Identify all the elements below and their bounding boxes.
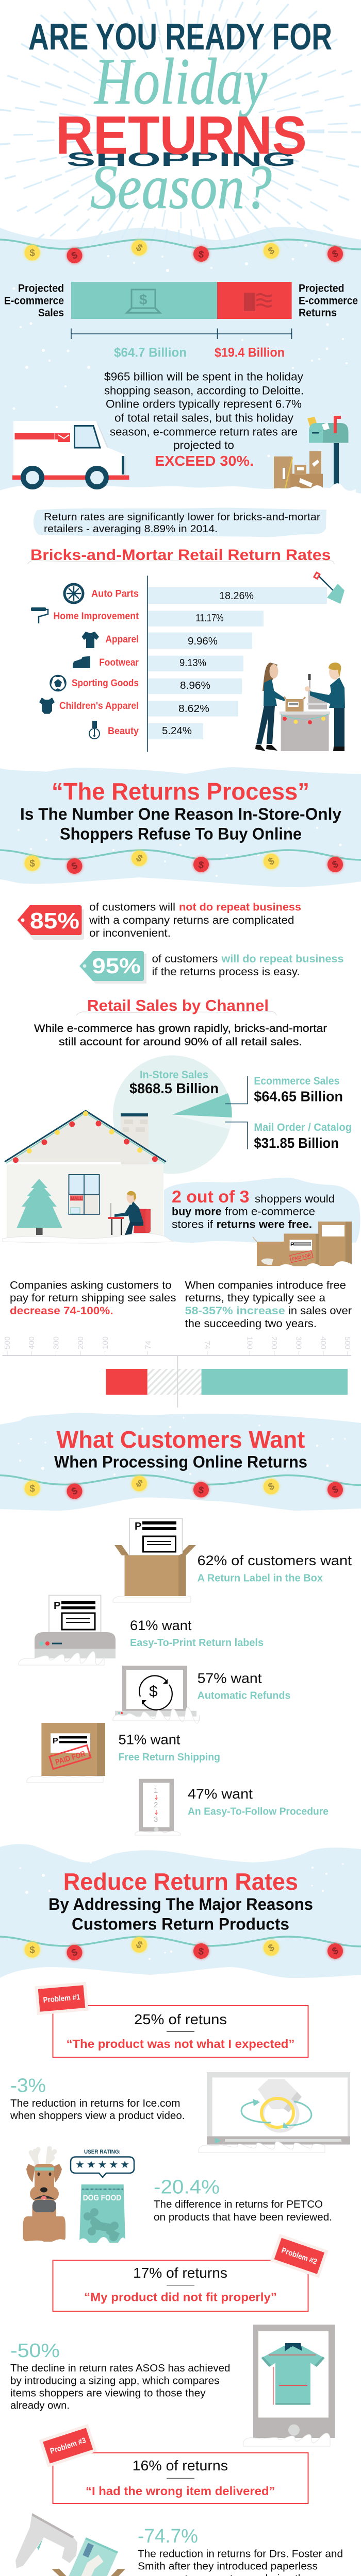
text: 57 percent [198, 1670, 290, 1702]
text: 85 percent: or inconvenient. [89, 927, 171, 939]
illustration: computer with automatic refund: $ [149, 1683, 158, 1700]
bar: auto parts [148, 587, 327, 604]
pie label: in-store: In-Store Sales [140, 1069, 208, 1081]
paragraph: deloitte projection [104, 370, 304, 469]
panel: problem 3 [39, 2424, 308, 2503]
tree [17, 1179, 62, 1235]
icon: nail polish [89, 721, 100, 739]
category labels: Home Improvement [54, 611, 139, 622]
string of dollar lights 4: $ [134, 1939, 144, 1951]
panel: two out of three callout: buy more [172, 1206, 222, 1218]
chart axis: 100 [245, 1336, 254, 1349]
text: free returns: the succeeding two years. [185, 1318, 317, 1330]
chart axis: 400 [319, 1336, 327, 1349]
text: 62 percent [198, 1553, 352, 1584]
pie label: ecommerce: $64.65 Billion [254, 1088, 343, 1105]
icon: tire [64, 584, 83, 603]
stamp: problem 2 [270, 2234, 329, 2278]
dog food bag [79, 2184, 125, 2243]
illustration: phone with steps [135, 1779, 180, 1835]
illustration: return counter with customer and clerk [255, 663, 345, 751]
illustration: phone with sizing app [243, 2325, 335, 2446]
text: minus 20.4 percent: -20.4% [154, 2176, 220, 2198]
text: 47 percent [188, 1786, 329, 1817]
pie label: in-store [129, 1069, 219, 1096]
window [69, 1175, 99, 1214]
text: minus 3 percent [10, 2075, 185, 2122]
subheading: Customers Return Products [72, 1914, 289, 1933]
amounts [114, 346, 285, 360]
string of dollar lights 4: $ [198, 1946, 205, 1958]
icon: delivery truck [12, 421, 129, 489]
text: 62 percent: A Return Label in the Box [198, 1573, 323, 1584]
string of dollar lights 1: $ [29, 248, 35, 259]
text: user rating: USER RATING: [84, 2149, 121, 2155]
pie label: in-store: $868.5 Billion [129, 1080, 219, 1096]
text: 62 percent: 62% of customers want [198, 1553, 352, 1568]
illustration: parcel with paid for stamp: P [53, 1737, 58, 1745]
bar: childrens apparel: 8.62% [178, 703, 209, 715]
text: retail sales intro [34, 1023, 327, 1048]
chart axis: 500 [343, 1336, 352, 1349]
text: minus 50 percent: by introducing a sizing app, which compares [10, 2375, 219, 2386]
string of dollar lights 2: $ [134, 853, 144, 865]
bar: projected sales versus returns [71, 282, 292, 319]
heading: the returns process: “The Returns Process” [52, 778, 309, 805]
bar: increase [202, 1369, 348, 1395]
text: 61 percent: 61% want [130, 1618, 192, 1633]
label: projected e-commerce sales: E-commerce [4, 295, 64, 307]
callout: bricks and mortar return rates: retailers - averaging 8.89% in 2014. [44, 523, 218, 535]
snow drift [271, 483, 356, 502]
string of dollar lights 3: $ [29, 1484, 35, 1494]
text: minus 74.7 percent [138, 2526, 343, 2576]
label: projected e-commerce sales [4, 282, 64, 319]
text: retail sales intro: still account for around 90% of all retail sales. [59, 1036, 302, 1048]
text: minus 3 percent: The reduction in returns for Ice.com [10, 2098, 180, 2109]
figure: man at desk [108, 1191, 151, 1235]
text: 61 percent: Easy-To-Print Return labels [130, 1637, 264, 1649]
subheading [48, 1895, 313, 1933]
stamp: problem 2: Problem #2 [280, 2246, 318, 2266]
pie label: ecommerce [254, 1075, 343, 1105]
heading: retail sales by channel: Retail Sales by Channel [87, 996, 269, 1014]
string of dollar lights 1: $ [331, 248, 340, 260]
figure: customer [255, 663, 285, 751]
chimney [121, 1113, 149, 1170]
bar: apparel: 9.96% [188, 636, 218, 647]
text: free returns: returns, they typically see a [185, 1292, 325, 1304]
text: minus 20.4 percent: on products that have been reviewed. [154, 2212, 332, 2223]
stamp: paid for [50, 1745, 91, 1769]
stamp: problem 3 [39, 2424, 97, 2467]
rating bubble [71, 2157, 134, 2177]
illustration: scanner and box [15, 2513, 126, 2576]
title line: season script: Season? [90, 152, 272, 222]
text: free returns: 58-357% increase [185, 1305, 285, 1317]
chart axis: 300 [294, 1336, 303, 1349]
chart axis: 500 [3, 1336, 12, 1349]
text: 95 percent: of customers [152, 953, 218, 965]
string of dollar lights 4: $ [331, 1945, 340, 1957]
text: paying for return shipping [10, 1279, 176, 1317]
bar: hatched baseline [147, 1369, 202, 1395]
text: 85 percent: with a company returns are complicated [89, 914, 294, 926]
string of dollar lights 3: $ [134, 1478, 144, 1490]
panel: what customers want banner [0, 1413, 361, 1511]
bar: sporting goods [148, 679, 242, 694]
chart axis: 74 [203, 1341, 211, 1349]
bracket under bar [71, 329, 292, 339]
subheading [20, 805, 341, 843]
subheading: By Addressing The Major Reasons [48, 1895, 313, 1913]
panel: problem 1: 25% of retuns [134, 2011, 227, 2027]
title line: shopping: SHOPPING [67, 149, 296, 171]
bar chart: retail return rates [147, 575, 327, 752]
panel: two out of three callout: from e-commerce [225, 1206, 315, 1218]
bar: footwear: 9.13% [179, 657, 206, 669]
paragraph: deloitte projection: $965 billion will be spent in the holiday [104, 370, 303, 383]
bar: childrens apparel [148, 701, 238, 717]
category labels: Footwear [99, 657, 139, 668]
string of dollar lights 3 [0, 1476, 361, 1499]
icon: mailbox and parcels [274, 416, 349, 488]
category labels [54, 589, 139, 737]
panel: returns process banner [0, 767, 361, 887]
pie label: ecommerce: Ecommerce Sales [254, 1075, 339, 1087]
string of dollar lights 2: $ [29, 858, 35, 869]
panel: reduce return rates banner [0, 1844, 361, 1978]
text: minus 3 percent: when shoppers view a product video. [10, 2110, 185, 2122]
text: 85 percent: not do repeat business [179, 902, 301, 913]
string of dollar lights 4: $ [267, 1942, 276, 1954]
text: minus 50 percent: The decline in return rates ASOS has achieved [10, 2363, 230, 2374]
roof [5, 1111, 166, 1162]
pie chart: retail sales by channel [113, 1055, 352, 1174]
bar: sporting goods: 8.96% [180, 680, 210, 691]
label: projected e-commerce sales: Projected [18, 282, 64, 295]
icon: shirt [81, 632, 99, 648]
category labels: Auto Parts [91, 589, 139, 600]
paragraph: deloitte projection: shopping season, according to Deloitte. [104, 384, 304, 397]
panel: problem 3: 16% of returns [133, 2458, 228, 2473]
string of dollar lights 3: $ [198, 1485, 205, 1496]
panel: problem 1: “The product was not what I expected” [67, 2037, 294, 2050]
bar: decrease [106, 1369, 147, 1395]
string of dollar lights 3: $ [267, 1481, 276, 1493]
panel: two out of three callout [164, 1178, 360, 1243]
category labels: Apparel [105, 634, 139, 645]
chart axis [2, 1336, 352, 1356]
chart axis: 200 [270, 1336, 278, 1349]
illustration: parcel with paid for stamp [27, 1723, 105, 1783]
pie label: mail order: $31.85 Billion [254, 1135, 339, 1151]
string of dollar lights 2: $ [331, 859, 340, 871]
paragraph: deloitte projection: season, e-commerce return rates are [110, 425, 298, 438]
illustration: return label in the box: P [135, 1521, 141, 1532]
panel: problem 1 [35, 1982, 308, 2057]
bar: home improvement [148, 611, 264, 626]
bar: auto parts: 18.26% [219, 590, 254, 602]
amounts: $19.4 Billion [215, 346, 285, 360]
text: 47 percent: 47% want [188, 1786, 253, 1802]
illustration: phone with steps: 1 [154, 1786, 158, 1795]
title line: holiday script: Holiday [93, 45, 267, 118]
text: 95 percent: will do repeat business [221, 953, 343, 965]
string of dollar lights 3: $ [70, 1485, 79, 1498]
text: minus 50 percent: items shoppers are viewing to those they [10, 2388, 206, 2399]
subheading: Shoppers Refuse To Buy Online [60, 824, 302, 843]
text: 95 percent [152, 953, 343, 978]
string of dollar lights 2: $ [267, 856, 276, 868]
label: projected e-commerce returns: Returns [299, 307, 337, 319]
text: 57 percent: 57% want [198, 1670, 262, 1686]
string of dollar lights 4 [0, 1937, 361, 1960]
string of dollar lights 3: $ [331, 1484, 340, 1496]
tag: 85 percent [18, 905, 84, 940]
chart axis: 200 [76, 1336, 85, 1349]
text: minus 74.7 percent: -74.7% [138, 2526, 198, 2547]
heading: bricks and mortar retail return rates: Bricks-and-Mortar Retail Return Rates [30, 547, 331, 564]
bar: beauty [148, 723, 203, 739]
decorative sunburst rays [0, 0, 361, 240]
chart axis: 400 [27, 1336, 36, 1349]
heading: reduce return rates: Reduce Return Rates [63, 1868, 298, 1895]
callout: bricks and mortar return rates: Return rates are significantly lower for bricks-and-mortar [44, 512, 320, 523]
text: free returns: in sales over [288, 1305, 352, 1317]
label: projected e-commerce returns [299, 282, 358, 319]
paragraph: deloitte projection: Online orders typically represent 6.7% [106, 398, 302, 411]
chart axis: 74 [144, 1341, 153, 1349]
icon: paint roller [31, 607, 48, 623]
text: 51 percent: Free Return Shipping [119, 1752, 220, 1763]
stamp: problem 1: Problem #1 [43, 1993, 80, 2005]
text: minus 50 percent: -50% [10, 2340, 60, 2362]
category labels: Children's Apparel [59, 701, 139, 711]
text: minus 74.7 percent: The reduction in returns for Drs. Foster and [138, 2548, 343, 2560]
illustration: parcels paid for [253, 1222, 358, 1273]
text: 57 percent: Automatic Refunds [198, 1690, 290, 1702]
illustration: parcels paid for: P [290, 1242, 294, 1248]
illustration: dog with rating and food [0, 2148, 134, 2252]
tag: 95 percent: 95% [92, 954, 141, 978]
text: free returns [185, 1279, 352, 1330]
panel: problem 3: “I had the wrong item delivered” [86, 2484, 275, 2498]
text: minus 74.7 percent: Smith after they introduced paperless [138, 2561, 318, 2572]
text: 85 percent [89, 902, 301, 939]
illustration: printer: P [54, 1600, 60, 1612]
icon: laptop [127, 290, 160, 313]
icon: antlers [31, 2148, 55, 2168]
string of dollar lights 2 [0, 850, 361, 874]
dog food bag: DOG FOOD [83, 2194, 121, 2202]
callout: exceed 30%: EXCEED 30%. [155, 453, 254, 469]
text: minus 20.4 percent [154, 2176, 332, 2223]
panel: problem 2 [53, 2234, 329, 2311]
illustration: return label in the box [113, 1518, 196, 1602]
text: paying for return shipping: decrease 74-100%. [10, 1305, 113, 1317]
string of dollar lights 1: $ [198, 249, 205, 261]
text: paying for return shipping: Companies asking customers to [10, 1279, 172, 1291]
stamp: problem 1 [35, 1982, 89, 2015]
tag: 95 percent [79, 951, 146, 984]
icon: onesie [39, 698, 55, 714]
text: minus 50 percent: already own. [10, 2400, 70, 2412]
stamp: paid for: PAID FOR [54, 1749, 87, 1767]
subheading: When Processing Online Returns [54, 1453, 307, 1471]
text: minus 50 percent [10, 2340, 230, 2412]
panel: two out of three callout: returns were free. [217, 1219, 312, 1231]
parcel on counter [284, 697, 305, 711]
text: retail sales intro: While e-commerce has grown rapidly, bricks-and-mortar [34, 1023, 327, 1035]
background: header snow band [0, 227, 361, 494]
illustration: phone with steps: 2 [154, 1801, 158, 1809]
illustration: video of ring [199, 2072, 350, 2153]
bar: beauty: 5.24% [162, 725, 192, 737]
pie label: mail order [254, 1122, 352, 1151]
diverging bar chart: sales change [2, 1336, 352, 1408]
counter [281, 715, 329, 751]
string of dollar lights 4: $ [29, 1945, 35, 1956]
string of dollar lights 1: $ [70, 250, 79, 262]
stamp: problem 3: Problem #3 [49, 2436, 87, 2456]
snow under house [3, 1233, 173, 1243]
house wall [7, 1164, 163, 1239]
icon: paper bill [244, 293, 272, 311]
string of dollar lights 1 [0, 240, 361, 263]
bar: footwear [148, 656, 243, 671]
panel: two out of three callout: 2 out of 3 [172, 1187, 250, 1206]
amounts: $64.7 Billion [114, 346, 187, 360]
text: 51 percent: 51% want [119, 1732, 180, 1747]
pie label: mail order: Mail Order / Catalog [254, 1122, 352, 1133]
label: projected e-commerce sales: Sales [38, 307, 64, 319]
register [307, 674, 327, 709]
icon: boot [73, 656, 90, 668]
text: minus 20.4 percent: The difference in returns for PETCO [154, 2199, 323, 2210]
text: 61 percent [130, 1618, 264, 1649]
string of dollar lights 2: $ [70, 860, 79, 872]
text: 51 percent [119, 1732, 220, 1763]
text: 47 percent: An Easy-To-Follow Procedure [188, 1806, 329, 1817]
title [28, 16, 332, 222]
paragraph: deloitte projection: projected to [173, 439, 234, 452]
heading: what customers want: What Customers Want [56, 1426, 305, 1453]
text: 85 percent: of customers will [89, 902, 175, 913]
string of dollar lights 1: $ [134, 242, 144, 254]
text: minus 3 percent: -3% [10, 2075, 46, 2096]
subheading: Is The Number One Reason In-Store-Only [20, 805, 341, 823]
rating bubble: ★★★★★ [75, 2159, 129, 2171]
tag: 85 percent: 85% [30, 908, 79, 934]
panel: two out of three callout: stores if [172, 1219, 213, 1231]
string of dollar lights 2: $ [198, 859, 205, 871]
counter lights [281, 714, 329, 724]
text: free returns: When companies introduce free [185, 1279, 346, 1291]
panel: problem 2: “My product did not fit properly” [84, 2291, 277, 2304]
title line: returns: RETURNS [56, 105, 307, 166]
bar: home improvement: 11.17% [196, 613, 224, 624]
window: MALL [71, 1196, 83, 1201]
panel: two out of three callout: shoppers would [255, 1193, 335, 1205]
bar: projected sales versus returns: $ [139, 292, 147, 308]
chart axis: 100 [101, 1336, 110, 1349]
figure: dog [23, 2164, 65, 2242]
bar: apparel [148, 633, 252, 649]
illustration: printer [19, 1595, 116, 1665]
illustration: house with lights [5, 1111, 166, 1239]
callout: bricks and mortar return rates [34, 508, 326, 537]
icon: snow shovel [314, 572, 347, 604]
string of dollar lights 4: $ [70, 1947, 79, 1959]
string of dollar lights 1: $ [267, 245, 276, 257]
paragraph: deloitte projection: of total retail sales, but this holiday [114, 411, 293, 425]
text: 95 percent: if the returns process is easy. [152, 966, 300, 978]
illustration: phone with steps: 3 [154, 1815, 158, 1824]
chart axis: 300 [52, 1336, 61, 1349]
category labels: Sporting Goods [72, 678, 139, 689]
icon: soccer ball [51, 675, 66, 691]
figure: clerk [305, 663, 345, 751]
illustration: computer with automatic refund [113, 1668, 200, 1723]
stamp: paid for: PAID FOR [291, 1252, 311, 1262]
panel: problem 2: 17% of returns [133, 2265, 227, 2281]
category labels: Beauty [108, 726, 139, 737]
text: paying for return shipping: pay for return shipping see sales [10, 1292, 176, 1304]
label: projected e-commerce returns: Projected [299, 282, 344, 295]
